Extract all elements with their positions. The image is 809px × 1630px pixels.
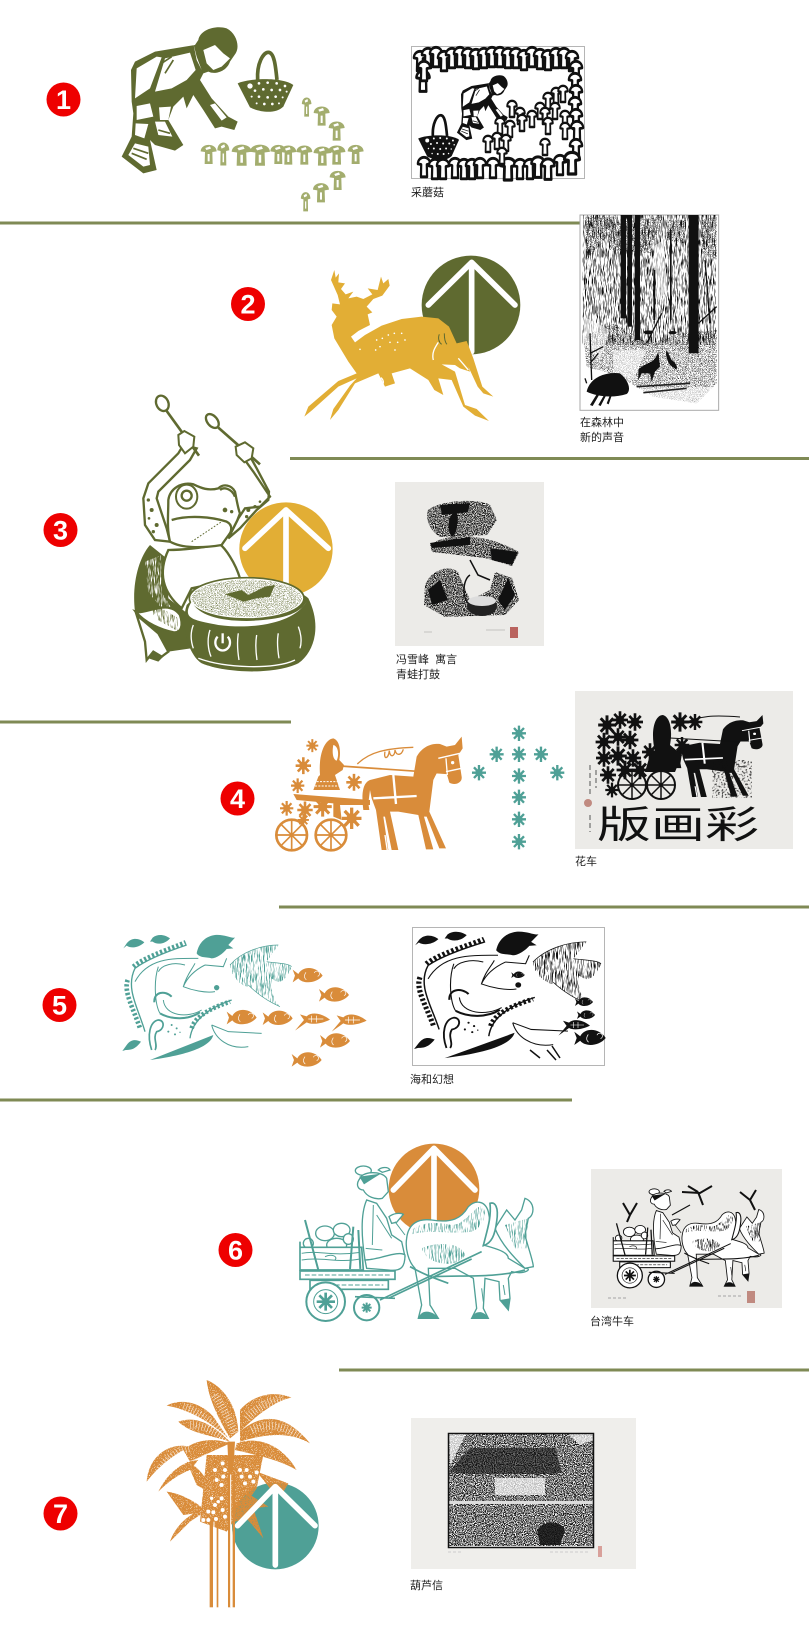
illustration: palm trees and arrow circle	[147, 1380, 319, 1607]
caption: gourd letter: 葫芦信	[410, 1579, 443, 1592]
driver and cart	[276, 738, 447, 850]
print: Taiwan ox cart	[591, 1169, 782, 1308]
badge: number 4	[220, 782, 254, 816]
illustration: deer and arrow circle	[304, 256, 520, 421]
seal	[747, 1291, 755, 1303]
illustration: frog drummer and arrow circle	[134, 394, 333, 671]
arrow circle	[422, 256, 520, 354]
print: forest	[580, 215, 719, 410]
badge: number 5: 5	[52, 990, 67, 1020]
badge: number 6	[218, 1233, 252, 1267]
arrow circle base	[232, 1483, 319, 1569]
badge: number 6: 6	[228, 1236, 243, 1266]
badge: number 3: 3	[53, 516, 68, 546]
caption: forest: 在森林中	[580, 415, 624, 429]
badge: number 5	[42, 988, 76, 1022]
birds	[623, 1186, 756, 1222]
badge: number 2	[231, 287, 265, 321]
arrow	[238, 1487, 315, 1565]
caption: new voices: 新的声音	[580, 430, 624, 444]
badge: number 2: 2	[240, 290, 256, 320]
badge: number 7	[44, 1496, 78, 1530]
illustration: sea fantasy	[122, 935, 367, 1067]
print: picking mushrooms	[412, 46, 584, 180]
arrow circle	[389, 1144, 479, 1234]
caption: fable: 冯雪峰 寓言	[396, 652, 457, 666]
badge: number 4: 4	[230, 784, 245, 814]
mushroom trail	[201, 97, 364, 211]
orange fish	[227, 968, 367, 1067]
caption: sea fantasy: 海和幻想	[410, 1072, 454, 1086]
print title lettering: 版画彩	[597, 804, 759, 846]
seal	[510, 627, 518, 638]
teal flowers	[472, 726, 564, 849]
horse	[362, 737, 463, 851]
illustration: flower cart	[276, 726, 564, 851]
print: frog fable	[395, 482, 544, 646]
power symbol	[215, 633, 230, 650]
caption: Taiwan ox cart: 台湾牛车	[590, 1314, 634, 1328]
print: flower cart	[575, 691, 793, 849]
palm trees	[147, 1380, 310, 1607]
caption: flower cart: 花车	[575, 854, 597, 868]
figure and sea creatures	[122, 935, 292, 1060]
illustration: boy picking mushrooms	[122, 27, 364, 211]
dividers	[0, 222, 809, 1372]
badge: number 3	[44, 513, 78, 547]
print: sea fantasy	[412, 928, 606, 1066]
caption: frog drumming: 青蛙打鼓	[396, 667, 440, 681]
drumsticks	[154, 394, 260, 464]
print: gourd letter	[411, 1418, 636, 1569]
caption: picking mushrooms: 采蘑菇	[411, 185, 444, 199]
badge: number 1	[46, 82, 80, 116]
deer	[304, 270, 493, 421]
illustration: ox cart and arrow circle	[300, 1144, 533, 1321]
drum	[184, 578, 315, 671]
badge: number 1: 1	[56, 85, 71, 115]
ox cart	[300, 1166, 533, 1321]
arrow circle	[239, 502, 333, 596]
seal	[598, 1546, 602, 1557]
badge: number 7: 7	[53, 1499, 68, 1529]
frog	[134, 394, 270, 662]
seal	[584, 799, 592, 807]
